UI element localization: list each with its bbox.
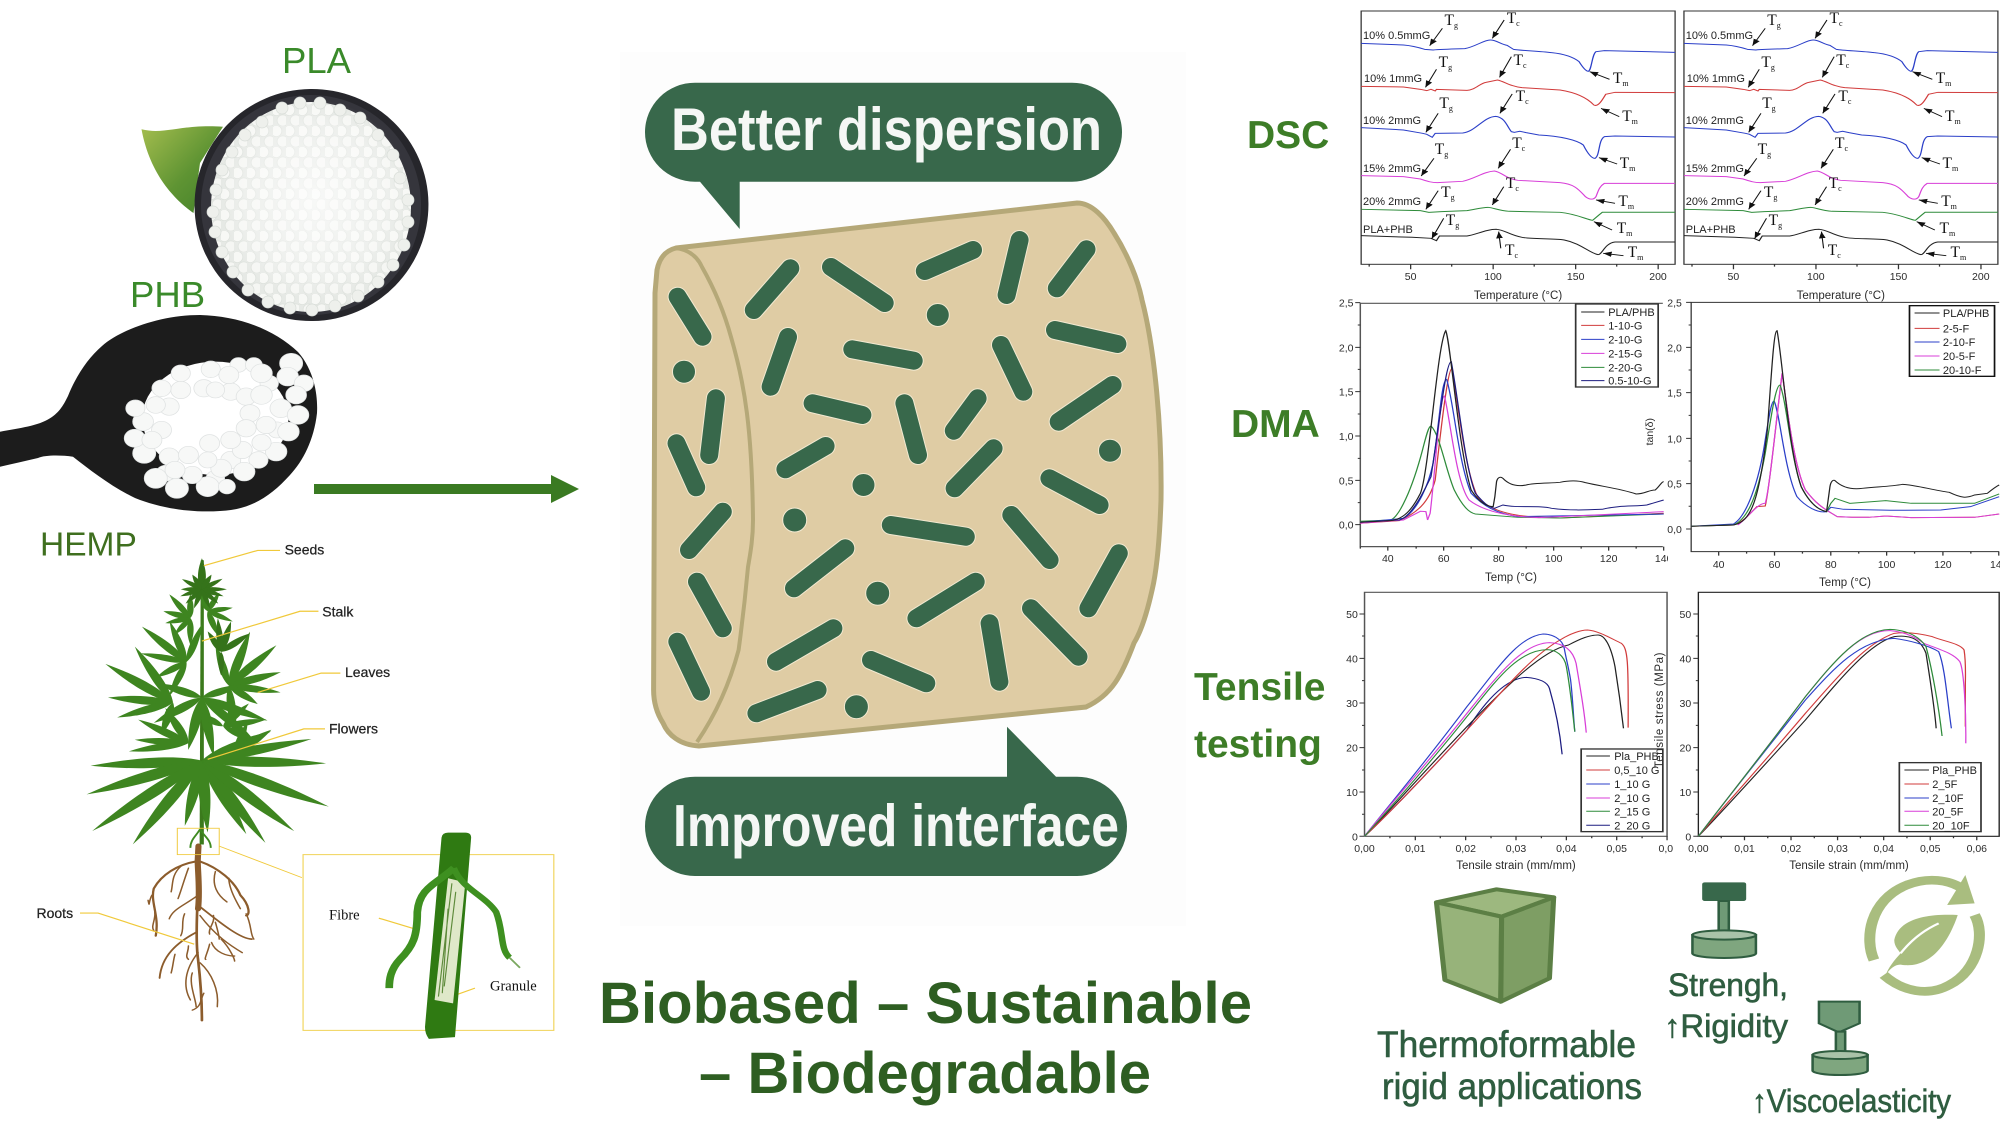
chart: DSC right: 150 (1890, 271, 1907, 283)
chart: DSC right: T (1940, 220, 1949, 237)
plant leaves (85, 558, 331, 847)
chart: DSC left: T (1446, 212, 1455, 229)
chart: DSC left: T (1507, 10, 1516, 27)
chart: DMA right (1644, 297, 2000, 589)
chart: DSC left: PLA+PHB (1363, 224, 1413, 236)
chart: DMA left: 2,0 (1339, 342, 1354, 354)
chart: DSC right: PLA+PHB (1686, 224, 1736, 236)
chart: DMA right: 40 (1713, 559, 1725, 571)
chart: tensile right: 30 (1680, 698, 1691, 710)
chart: DSC left: g (1448, 63, 1452, 72)
heading: DSC: DSC (1247, 114, 1329, 157)
chart: DSC left: 50 (1405, 271, 1417, 283)
chart: DSC left: g (1451, 193, 1455, 202)
chart: DMA right: PLA/PHB (1943, 308, 1989, 320)
chart: DMA left: 0,5 (1339, 475, 1354, 487)
chart: tensile right: 40 (1680, 653, 1691, 665)
chart: DSC right: g (1777, 21, 1781, 30)
chart: DSC left: m (1622, 79, 1629, 88)
chart: DSC right: c (1844, 144, 1848, 153)
icon: PLA bowl with pellets (173, 67, 450, 343)
label: Roots: Roots (36, 905, 73, 921)
chart: DMA right: 1,0 (1667, 433, 1682, 445)
chart: DSC left: T (1514, 52, 1523, 69)
chart: tensile left: 2_10 G (1614, 793, 1650, 805)
chart: DSC left (1361, 10, 1675, 302)
chart: DSC right: T (1829, 175, 1838, 192)
panel: centre background (620, 52, 1186, 926)
chart: tensile right: 50 (1680, 609, 1691, 621)
chart: DMA left: 2-15-G (1608, 348, 1642, 360)
chart: DSC left: 10% 1mmG (1364, 73, 1422, 85)
label: Fibre: Fibre (329, 908, 360, 924)
label: Seeds: Seeds (285, 542, 324, 558)
label: Granule: Granule (490, 978, 537, 994)
chart: tensile right: 0,06 (1967, 843, 1987, 855)
chart: DSC right: T (1945, 108, 1954, 125)
chart: DMA right: 2-10-F (1943, 337, 1976, 349)
chart: tensile right: 0,01 (1734, 843, 1755, 855)
illustration: hemp plant (80, 550, 554, 1039)
chart: DSC right: g (1771, 63, 1775, 72)
chart: DSC left: T (1444, 12, 1454, 29)
chart: DSC right: m (1960, 253, 1967, 262)
chart: DMA left: PLA/PHB (1608, 307, 1655, 319)
chart: tensile left: 2_15 G (1614, 806, 1650, 818)
chart: DMA right: 20-10-F (1943, 365, 1982, 377)
chart: DSC left: T (1613, 70, 1622, 87)
chart: DSC right: 15% 2mmG (1686, 163, 1744, 175)
chart: tensile left: 0,00 (1354, 843, 1375, 855)
chart: tensile left: 0,01 (1405, 843, 1426, 855)
chart: DMA left (1339, 298, 1673, 584)
chart: DSC right: 20% 2mmG (1686, 196, 1744, 208)
chart: DSC right: c (1838, 184, 1842, 193)
chart: DSC left: m (1637, 253, 1644, 262)
icon: PHB spoon (0, 315, 317, 511)
chart: DSC left: T (1441, 184, 1451, 201)
chart: DMA left: 80 (1493, 553, 1505, 565)
chart: DSC right: 10% 1mmG (1687, 73, 1745, 85)
chart: DSC right: T (1758, 141, 1767, 158)
label: Flowers: Flowers (329, 721, 378, 737)
chart: DSC right: 100 (1807, 271, 1825, 283)
chart: tensile left: Pla_PHB (1614, 751, 1659, 763)
icon: leaf behind PLA bowl (142, 126, 223, 213)
chart: DSC right: T (1764, 184, 1773, 201)
chart: DSC left: m (1632, 117, 1639, 126)
chart: DSC right: 10% 2mmG (1686, 115, 1744, 127)
chart: DSC right: 10% 0.5mmG (1686, 30, 1753, 42)
chart: DMA left: 0.5-10-G (1608, 376, 1652, 388)
chart: DSC left: c (1514, 251, 1518, 260)
chart: tensile left: 0,04 (1556, 843, 1577, 855)
chart: DSC left: T (1620, 155, 1629, 172)
chart: tensile right: 0,02 (1781, 843, 1801, 855)
chart: DSC left: T (1622, 108, 1632, 125)
chart: DMA left: Temp (°C) (1485, 572, 1537, 584)
chart: DSC right: m (1951, 202, 1958, 211)
chart: tensile right: 20 (1680, 743, 1691, 755)
chart: DSC left: T (1516, 88, 1525, 105)
chart: DSC left: Temperature (°C) (1474, 290, 1562, 302)
chart: DSC right: c (1846, 61, 1850, 70)
chart: DMA right: 20-5-F (1943, 351, 1976, 363)
chart: DSC left: m (1628, 202, 1635, 211)
chart: DSC left: T (1435, 141, 1444, 158)
heading: Tensile testing: Tensile (1194, 666, 1326, 709)
chart: DSC left: T (1506, 175, 1515, 192)
chart: tensile right: 0,05 (1920, 843, 1941, 855)
chart: DMA right: 2,5 (1667, 297, 1682, 309)
chart: DSC right: c (1848, 97, 1852, 106)
chart: DSC right: T (1838, 88, 1848, 105)
chart: tensile right: 2_5F (1932, 779, 1958, 791)
chart: tensile right: 0,03 (1827, 843, 1848, 855)
chart: DSC right: T (1836, 52, 1846, 69)
heading: DMA: DMA (1231, 403, 1320, 446)
chart: DMA left: 40 (1382, 553, 1394, 565)
chart: DSC left: 10% 2mmG (1363, 115, 1421, 127)
chart: DMA left: 2-20-G (1608, 362, 1642, 374)
chart: DSC left: 15% 2mmG (1363, 163, 1421, 175)
chart: DSC right: T (1941, 193, 1951, 210)
chart: tensile left: Tensile strain (mm/mm) (1456, 860, 1576, 872)
chart: DSC left: c (1525, 97, 1529, 106)
chart: tensile right (1654, 592, 1999, 872)
chart: DMA right: 120 (1934, 559, 1952, 571)
chart: tensile right: 20_5F (1932, 806, 1964, 818)
chart: tensile left: 0 (1352, 831, 1358, 843)
chart: DMA right: 2-5-F (1943, 323, 1969, 335)
chart: DSC right: g (1767, 150, 1771, 159)
text: Viscoelasticity: ↑Viscoelasticity (1752, 1083, 1951, 1119)
chart: DSC left: c (1522, 144, 1526, 153)
fibre rods (676, 240, 1119, 713)
label: HEMP: HEMP (40, 526, 137, 564)
chart: DMA right: 0,5 (1667, 479, 1682, 491)
chart: DMA left: 1-10-G (1608, 320, 1642, 332)
chart: DSC right: T (1936, 70, 1945, 87)
chart: DSC right: 50 (1728, 271, 1739, 283)
chart: DSC left: T (1618, 193, 1628, 210)
chart: DMA left: 1,0 (1339, 431, 1354, 443)
chart: DSC right: g (1772, 104, 1776, 113)
chart: DSC right: T (1942, 155, 1952, 172)
chart: DSC left: 150 (1567, 271, 1585, 283)
chart: DSC left: g (1444, 150, 1448, 159)
icon: viscoelastic specimen (1813, 1002, 1868, 1075)
chart: tensile left: 0,0 (1658, 843, 1673, 855)
chart: DMA left: 1,5 (1339, 387, 1354, 399)
granule dots (672, 304, 1122, 719)
chart: DMA left: 0,0 (1339, 520, 1354, 532)
chart: DMA right: 100 (1878, 559, 1896, 571)
icon: green cube (1436, 889, 1554, 1002)
chart: DMA right: 60 (1769, 559, 1780, 571)
icon: recycling leaf (1870, 875, 1979, 991)
chart: DSC left: T (1617, 220, 1626, 237)
chart: DSC right: m (1945, 79, 1952, 88)
chart: DSC right: T (1769, 212, 1778, 229)
chart: DSC left: c (1515, 184, 1519, 193)
plant small fibre detail (190, 829, 211, 848)
chart: DSC right: T (1767, 12, 1777, 29)
chart: tensile right: 0,04 (1873, 843, 1894, 855)
chart: DMA right: Temp (°C) (1819, 577, 1871, 589)
text: Strengh, Rigidity: ↑Rigidity (1664, 1008, 1788, 1044)
chart: tensile right: 20_10F (1932, 820, 1970, 832)
callout leader lines (80, 550, 475, 996)
chart: tensile left: 0,03 (1506, 843, 1526, 855)
chart: DMA right: tan(δ) (1644, 418, 1656, 445)
chart: DSC right: m (1952, 164, 1959, 173)
chart: tensile left: 0,5_10 G (1614, 765, 1659, 777)
chart: DSC right: 200 (1972, 271, 1990, 283)
chart: tensile right: Pla_PHB (1932, 765, 1977, 777)
text: Thermoformable rigid applications: rigid applications (1382, 1066, 1642, 1107)
chart: DSC right: T (1950, 244, 1960, 261)
chart: DSC right: m (1954, 117, 1961, 126)
illustration: composite tube with dispersed fibres (654, 203, 1161, 746)
chart: DSC left: T (1628, 244, 1637, 261)
callout: Improved interface (645, 727, 1127, 876)
chart: tensile right: Tensile strain (mm/mm) (1789, 860, 1909, 872)
callout: Improved interface: Improved interface (673, 793, 1119, 859)
chart: DMA left: 100 (1545, 553, 1563, 565)
chart: DSC right: T (1762, 95, 1772, 112)
chart: DSC left: g (1454, 21, 1458, 30)
inset: fibre and granule stem section (303, 833, 554, 1039)
chart: DSC right: c (1839, 19, 1843, 28)
chart: DSC left: 100 (1484, 271, 1502, 283)
plant roots (148, 846, 254, 1020)
chart: DSC right: Temperature (°C) (1797, 290, 1885, 302)
arrow: raw materials to composite (314, 475, 579, 503)
chart: DMA right: 80 (1825, 559, 1837, 571)
chart: tensile left: 0,05 (1606, 843, 1627, 855)
chart: DSC left: T (1439, 54, 1448, 71)
label: Stalk: Stalk (322, 603, 354, 619)
chart: DMA left: 60 (1438, 553, 1450, 565)
title: Biobased Sustainable Biodegradable: Biobased – Sustainable (599, 971, 1252, 1036)
chart: tensile left: 50 (1346, 609, 1358, 621)
chart: DMA right: 0,0 (1667, 524, 1682, 536)
chart: DSC left: T (1512, 135, 1522, 152)
chart: DSC right: c (1837, 251, 1841, 260)
icon: rigid dumbbell specimen (1692, 882, 1756, 958)
chart: DMA left: 2,5 (1339, 298, 1354, 310)
chart: DSC left: m (1626, 229, 1633, 238)
text: Strengh, Rigidity: Strengh, (1668, 967, 1788, 1003)
heading: Tensile testing: testing (1194, 723, 1322, 766)
chart: DSC left: c (1523, 61, 1527, 70)
chart: tensile right: Tensile stress (MPa) (1654, 652, 1666, 768)
chart: DMA left: 2-10-G (1608, 334, 1642, 346)
chart: DMA right: 2,0 (1667, 342, 1682, 354)
chart: tensile right: 2_10F (1932, 793, 1964, 805)
label: PLA: PLA (282, 40, 352, 81)
chart: tensile left: 30 (1346, 698, 1358, 710)
chart: DSC left: g (1449, 104, 1453, 113)
chart: DSC left: T (1505, 242, 1514, 259)
chart: DMA right: 1,5 (1667, 388, 1682, 400)
chart: DSC left: 20% 2mmG (1363, 196, 1421, 208)
chart: tensile left: 10 (1346, 787, 1358, 799)
chart: tensile left: 20 (1346, 743, 1358, 755)
chart: tensile right: 10 (1680, 787, 1691, 799)
chart: DSC left: T (1439, 95, 1449, 112)
chart: tensile left: 0,02 (1455, 843, 1476, 855)
chart: DSC right: T (1830, 10, 1839, 27)
chart: tensile left (1346, 592, 1673, 872)
chart: DSC right: g (1773, 193, 1777, 202)
chart: DSC right (1684, 10, 1998, 302)
chart: DMA left: 120 (1600, 553, 1618, 565)
chart: DSC right: T (1835, 135, 1844, 152)
chart: DSC left: 200 (1649, 271, 1667, 283)
text: Thermoformable rigid applications: Thermoformable (1377, 1024, 1636, 1065)
chart: tensile left: 2_20 G (1614, 820, 1650, 832)
callout: Better dispersion (645, 83, 1122, 229)
callout: Better dispersion: Better dispersion (671, 96, 1102, 163)
title: Biobased Sustainable Biodegradable: – Biodegradable (699, 1041, 1151, 1106)
chart: tensile left: 1_10 G (1614, 779, 1650, 791)
chart: DSC left: g (1455, 221, 1459, 230)
label: PHB: PHB (130, 274, 205, 315)
chart: DSC right: m (1949, 229, 1956, 238)
chart: tensile right: 0,00 (1688, 843, 1709, 855)
chart: DSC left: m (1629, 164, 1636, 173)
chart: DSC right: T (1828, 242, 1837, 259)
chart: DSC left: c (1516, 19, 1520, 28)
chart: DSC left: 10% 0.5mmG (1363, 30, 1430, 42)
label: Leaves: Leaves (345, 664, 390, 680)
chart: DMA left: 140 (1655, 553, 1673, 565)
chart: tensile right: 0 (1685, 831, 1691, 843)
chart: DSC right: T (1761, 54, 1771, 71)
chart: tensile left: 40 (1346, 653, 1358, 665)
chart: DSC right: g (1778, 221, 1782, 230)
